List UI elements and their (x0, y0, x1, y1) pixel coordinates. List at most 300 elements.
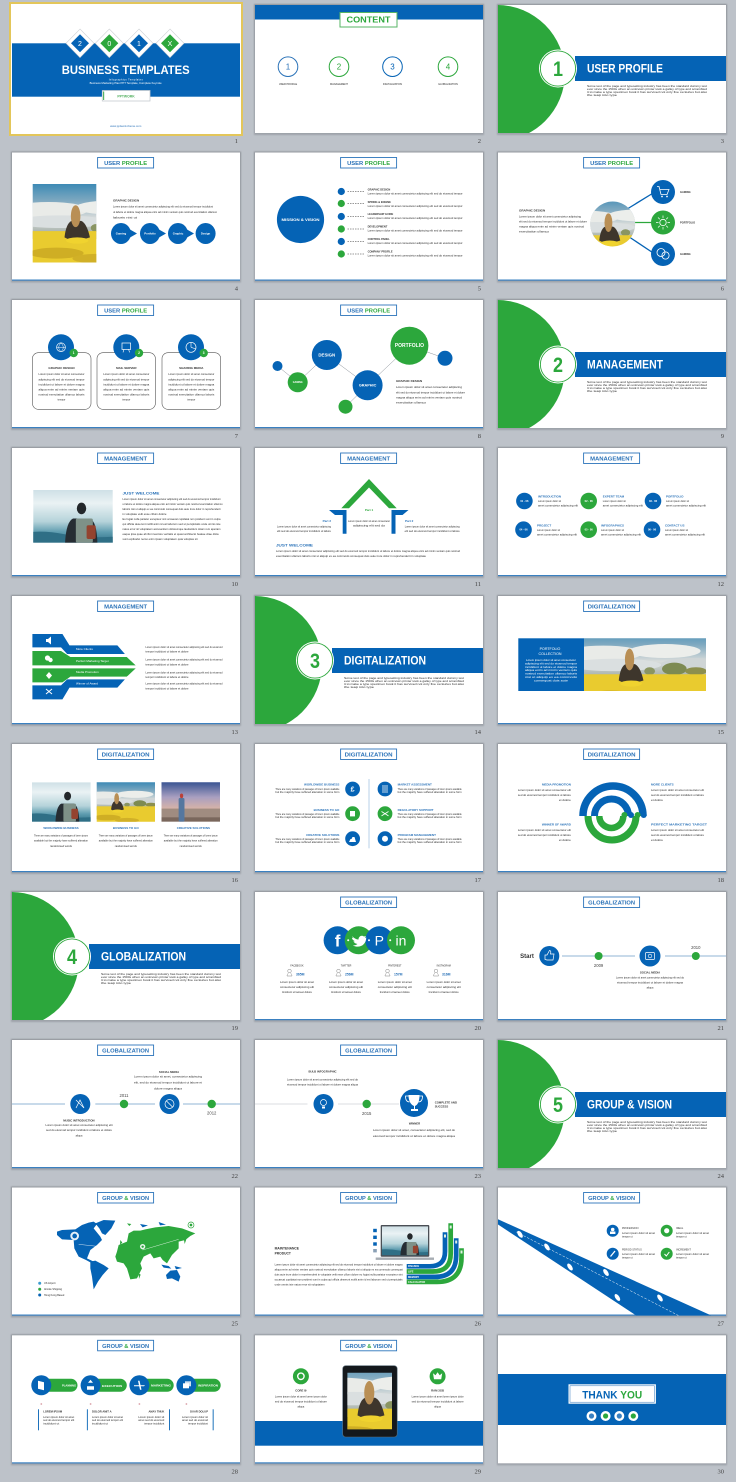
section description: it to make a type specimen book it has survived not only five centuries but also (344, 683, 465, 686)
topic text: amet consectetur adipiscing elit (603, 505, 643, 508)
step text: sed do eiusmod tempor elit (92, 1419, 123, 1422)
icon labels: GAMING (680, 252, 691, 256)
card: mail server: nostrud exercitation ullamco laboris (103, 393, 150, 396)
heading tag: GLOBALIZATION (345, 1048, 392, 1054)
photo: girl at overlook (162, 782, 220, 822)
bubbles: GAMING (293, 381, 303, 384)
left labels (518, 782, 572, 842)
text block: laboris nisi ut aliquip ex ea commodo consequat duis aute irure dolor in reprehenderit (122, 508, 221, 511)
text block: JUST WELCOME (276, 544, 314, 548)
text block (276, 544, 461, 558)
left labels: sed do eiusmod tempor incididunt ut labore (518, 834, 572, 837)
panel: slide 28 process pills: 28 (232, 1468, 238, 1475)
green pills (41, 1379, 221, 1392)
section description: ever since the 1500s when an unknown printer took a galley of type and scrambled (344, 680, 465, 683)
circular photo (590, 202, 636, 246)
topic circles: 03 · 06 (649, 499, 658, 503)
bulb note: Lorem ipsum dolor sit amet consectetur adipiscing elit sed do (287, 1078, 359, 1081)
PPTWORK badge: PPTWORK (117, 94, 135, 98)
feature text: Lorem ipsum dolor sit amet (676, 1253, 709, 1256)
section title: DIGITALIZATION (344, 656, 426, 668)
number ring: 3 (310, 650, 320, 673)
right labels: et dolore (651, 839, 664, 842)
agenda numbers: 4 (446, 62, 451, 72)
heading tag: USER PROFILE (347, 161, 390, 167)
list text: COMPANY PROFILE (368, 250, 393, 254)
step text: LOREM IPSUM (43, 1410, 63, 1414)
text block: sunt explicabo nemo enim ipsam voluptatem quia voluptas sit (122, 538, 198, 541)
card: sharing media: aliqua enim ad minim veniam quis (168, 388, 215, 391)
card: mail server: Lorem ipsum dolor sit amet consectetur (103, 373, 149, 376)
list text (368, 188, 463, 258)
panel: slide 6 connected services: 6 (721, 286, 725, 292)
feature text: PERIOD STATUS (622, 1248, 642, 1252)
heading tag (341, 1340, 397, 1351)
panel: slide 11 house diagram (254, 447, 484, 588)
green half circle (12, 892, 78, 1020)
social stats: FACEBOOK (290, 964, 304, 967)
social stats: Lorem ipsum dolor sit amet (329, 981, 363, 984)
right service text: There are many variations of passages of lorem ipsum available (398, 788, 462, 791)
part 2 left: elit sed do eiusmod tempor incididunt ut labore (277, 530, 332, 533)
right service text: but the majority have suffered alteration in some form (398, 816, 462, 819)
heading tag (98, 158, 154, 168)
year markers: 2012 (207, 1110, 217, 1116)
bulb note: eiusmod tempor incididunt ut labore et dolore magna aliqua (287, 1083, 359, 1086)
panel: slide 13 interlocking arrows: 13 (232, 729, 238, 736)
icon labels: GAMING (680, 190, 691, 194)
section description (344, 677, 465, 689)
text block (113, 198, 218, 220)
social stats: tincidunt ut laoreet dolore (380, 991, 410, 994)
feature text: PROFESSION (622, 1227, 639, 1230)
complete and success label: SUCCESS (435, 1105, 448, 1109)
blue band (255, 1421, 483, 1446)
topic circles: 04 · 06 (519, 528, 528, 532)
social dots (586, 1411, 638, 1421)
panel: slide 14 section digitalization: 14 (474, 729, 482, 736)
bubbles (272, 327, 452, 414)
curved ribbons (407, 1223, 462, 1282)
social stats (280, 964, 461, 994)
service icons: £ (351, 786, 355, 794)
step text (43, 1410, 209, 1425)
map legend (38, 1282, 65, 1297)
feature text: tempor ut (622, 1256, 633, 1259)
road (498, 1219, 711, 1316)
right labels: et dolore (651, 799, 664, 802)
bullet notes: Lorem ipsum dolor sit amet consectetur adipiscing elit sed do eiusmod (146, 646, 223, 649)
card: graphic design: Lorem ipsum dolor sit amet consectetur (38, 373, 85, 376)
heading tag (584, 897, 640, 908)
year marker: 2015 (362, 1111, 372, 1116)
heading tag: USER PROFILE (104, 161, 147, 167)
bullet notes: tempor incididunt ut labore et dolore (146, 676, 189, 679)
list text: Lorem ipsum dolor sit amet consectetur adipiscing elit sed do eiusmod tempor (368, 217, 463, 220)
arrow labels: Media Promotion (76, 670, 99, 674)
text block: in voluptate velit esse cillum dolore (122, 513, 167, 516)
part 1: Part 1 (365, 508, 373, 512)
section description: the leap into type (587, 94, 618, 97)
text block: natus error sit voluptatem accusantium doloremque laudantium totam rem aperiam (122, 528, 220, 531)
year markers (594, 945, 701, 968)
text block: unde omnis iste natus error sit voluptatem (275, 1284, 325, 1286)
panel: slide 30 thank you (497, 1334, 727, 1475)
dots and dashes list (338, 188, 364, 258)
left text: Lorem ipsum dolor sit amet lorem ipsum dolor (275, 1395, 327, 1398)
right text: aliqua (434, 1406, 442, 1409)
list text: Lorem ipsum dolor sit amet consectetur adipiscing elit sed do eiusmod tempor (368, 192, 463, 196)
caption text: There are many variations of passages of lorem ipsum (99, 834, 153, 838)
pill labels (62, 1383, 218, 1388)
panel: slide 1 cover: 1 (235, 138, 238, 145)
caption text: There are many variations of passages of lorem ipsum (34, 834, 88, 838)
text block: qui officia deserunt mollit anim id est laborum sed ut perspiciatis unde omnis iste (122, 523, 221, 526)
heading tag (98, 601, 154, 612)
heading tag: GLOBALIZATION (588, 900, 635, 906)
text block: Lorem ipsum dolor sit amet consectetur adipiscing elit sed do eiusmod tempor incididunt ut labore et dolore magna (275, 1264, 403, 1266)
card: graphic design: GRAPHIC DESIGN (48, 366, 75, 370)
mission circle: MISSION & VISION (282, 218, 320, 222)
list text: Lorem ipsum dolor sit amet consectetur adipiscing elit sed do eiusmod tempor (368, 230, 463, 232)
photo: man (32, 782, 91, 822)
topic text: amet consectetur adipiscing elit (666, 505, 706, 508)
panel: slide 20 social media (254, 891, 484, 1032)
list text: DEVELOPMENT (368, 224, 388, 228)
topic text: Lorem ipsum dolor sit (537, 529, 560, 532)
blue caption box: nisi ut aliquip ex ea commodo (525, 676, 578, 679)
text block: elit sed do eiusmod tempor incididunt ut labore et dolore (519, 220, 588, 224)
panel: slide 17 six services: 17 (474, 877, 482, 884)
topic text: amet consectetur adipiscing elit (665, 534, 705, 537)
left labels: WINNER OF AWARD (542, 823, 572, 827)
social stats: TWITTER (341, 964, 352, 967)
social stats: tincidunt ut laoreet dolore (282, 991, 313, 994)
panel: slide 12 six topics: 12 (718, 581, 724, 588)
panel: slide 28 process pills (11, 1334, 241, 1475)
card: sharing media: adipiscing elit sed do eiusmod tempor (168, 378, 214, 381)
right text: RAM 3GB (431, 1388, 444, 1392)
text block: exercitation ullamco laboris nisi ut aliquip ex ea commodo consequat duis aute irure dolor in reprehenderit in voluptate (276, 555, 427, 558)
step text: Lorem ipsum dolor sit (182, 1416, 208, 1419)
text block (275, 1246, 403, 1286)
road center dashes (516, 1232, 678, 1316)
bubbles: DESIGN (318, 352, 335, 358)
feature text: Lorem ipsum dolor sit amet (622, 1253, 655, 1256)
vertical accent bars (38, 1409, 214, 1430)
panel: slide 16 three photos (11, 743, 241, 884)
feature text: tempor ut (622, 1235, 633, 1238)
number ring (539, 1086, 577, 1124)
arc chart (583, 786, 643, 840)
part 2 left (277, 519, 332, 533)
social media note: Lorem ipsum dolor sit amet consectetur adipiscing elit sed do (616, 976, 685, 980)
number ring (53, 938, 91, 976)
arrow labels: More Clients (76, 647, 93, 651)
music note (46, 1118, 113, 1138)
text block: magna aliqua enim ad minim veniam quis nostrud (396, 396, 463, 399)
bubbles: GRAPHIC (359, 384, 377, 388)
section description (587, 381, 708, 393)
green half circle (498, 5, 564, 133)
left service text: There are many variations of passages of lorem ipsum available (275, 813, 340, 816)
section description: ever since the 1500s when an unknown printer took a galley of type and scrambled (101, 976, 222, 979)
left labels: et dolore (559, 799, 572, 802)
caption text: available but the majority have suffered alteration (99, 840, 153, 842)
panel: slide 27 road diagram: 27 (718, 1320, 725, 1328)
text block: Lorem ipsum dolor sit amet consectetur adipiscing (519, 216, 582, 218)
agenda circles (278, 57, 458, 76)
photo captions: WORLDWIDE BUSINESS (43, 826, 79, 830)
card: mail server: incididunt ut labore et dolore magna (103, 383, 150, 386)
social circles (324, 926, 415, 954)
agenda numbers: 1 (286, 62, 291, 72)
agenda labels: DIGITALIZATION (383, 83, 402, 86)
text block: GRAPHIC DESIGN (519, 208, 545, 212)
panel: slide 16 three photos: 16 (232, 877, 239, 884)
heading tag (98, 1045, 154, 1056)
feature text: tempor ut (676, 1256, 687, 1259)
step text: tempor incididunt (144, 1422, 165, 1425)
part 2 right: elit sed do eiusmod tempor incididunt ut labore (405, 530, 460, 533)
winner note (373, 1122, 455, 1138)
panel: slide 13 interlocking arrows (11, 595, 241, 736)
panel: slide 11 house diagram: 11 (475, 581, 481, 588)
topic text: Lorem ipsum dolor sit (538, 500, 561, 503)
panel: slide 10 just welcome: 10 (232, 581, 238, 588)
text block (519, 208, 588, 234)
social stats: consectetur adipiscing elit (378, 986, 412, 989)
left labels: sed do eiusmod tempor incididunt ut labore (518, 794, 572, 797)
blue caption box (518, 638, 584, 691)
topic text: amet consectetur adipiscing elit (538, 505, 578, 508)
topic text: Lorem ipsum dolor sit (666, 500, 689, 503)
panel: slide 5 mission and vision (254, 152, 484, 292)
caption text: randomised words (180, 845, 202, 848)
complete and success label: COMPLETE AND (435, 1100, 457, 1104)
text block (122, 492, 223, 541)
bubble row: Gaming (116, 232, 126, 236)
panel: slide 1 cover (10, 3, 242, 145)
social stats: Lorem ipsum dolor sit amet (378, 981, 412, 984)
ribbon labels: FINANCE (408, 1265, 419, 1268)
blue caption box: nostrud exercitation ullamco laboris (525, 673, 578, 676)
heading tag (584, 453, 640, 464)
photo: girl in field (96, 782, 155, 822)
text block: magna aliqua enim ad minim veniam quis nostrud (519, 226, 585, 228)
card: sharing media (162, 334, 221, 409)
bulb note (287, 1069, 359, 1086)
heading tag: USER PROFILE (347, 308, 390, 314)
blue caption box: consequat duis aute (534, 679, 569, 682)
winner note: eiusmod tempor incididunt ut labore et dolore magna aliqua (373, 1134, 455, 1138)
card: mail server: tempor (122, 398, 130, 401)
text block: occaecat cupidatat non proident sunt in culpa qui officia deserunt mollit anim id est laborum sed ut perspiciatis (275, 1278, 403, 1282)
panel: slide 2 content: 2 (478, 138, 481, 145)
map legend: US Airport (44, 1282, 56, 1285)
step text: incididunt ut (92, 1422, 108, 1425)
social media note: aliqua (647, 986, 654, 990)
bullet notes: Lorem ipsum dolor sit amet consectetur adipiscing elit sed do eiusmod (146, 658, 223, 661)
topic circles: 01 · 06 (520, 499, 529, 503)
left service text: BUSINESS TO GO (314, 808, 340, 812)
number ring: 2 (553, 354, 563, 377)
subtitle (90, 78, 162, 85)
list text: SPRING & ENGINE (368, 200, 391, 204)
music note: aliqua (76, 1134, 83, 1138)
caption text: randomised words (115, 845, 138, 848)
social circles: f (335, 932, 341, 950)
laptop (372, 1225, 438, 1260)
social circles: in (396, 932, 406, 948)
panel: slide 19 section globalization: 19 (232, 1025, 238, 1032)
year markers (119, 1093, 217, 1116)
heading tag: MANAGEMENT (590, 456, 634, 462)
heading tag: GROUP & VISION (102, 1196, 149, 1202)
card: graphic design: tempor (58, 398, 66, 401)
section description: it to make a type specimen book it has survived not only five centuries but also (587, 1127, 708, 1130)
list text: Lorem ipsum dolor sit amet consectetur adipiscing elit sed do eiusmod tempor (368, 205, 463, 208)
part 2 right: Lorem ipsum dolor sit amet consectetur adipiscing (405, 525, 460, 528)
music note: sed do eiusmod tempor incididunt ut labore et dolore (46, 1129, 113, 1132)
part 1: adipiscing elit sed do (353, 525, 386, 528)
heading tag: GROUP & VISION (345, 1344, 392, 1350)
panel: slide 17 six services (254, 743, 484, 884)
icon labels: PORTFOLIO (680, 220, 695, 224)
connecting lines (278, 346, 445, 407)
part 2 right: Part 2 (405, 519, 414, 523)
heading tag (341, 305, 397, 316)
panel: slide 18 concentric arcs: 18 (718, 877, 724, 884)
topic text: Lorem ipsum dolor sit (603, 500, 626, 503)
panel: slide 25 world map (11, 1186, 241, 1328)
connectors (628, 192, 654, 208)
heading tag: GLOBALIZATION (345, 900, 392, 906)
part 1: Lorem ipsum dolor sit amet consectetur (348, 520, 390, 523)
left service text: but the majority have suffered alteration in some form (275, 816, 339, 819)
card: graphic design: adipiscing elit sed do eiusmod tempor (38, 378, 85, 381)
social stats: consectetur adipiscing elit (329, 986, 363, 989)
topic text: Lorem ipsum dolor sit (665, 529, 688, 532)
topic text: PROJECT (537, 524, 551, 528)
section description (101, 973, 222, 985)
list text: LEADERSHIP GUIDE (368, 212, 393, 216)
left service text: There are many variations of passages of lorem ipsum available (275, 838, 340, 841)
card: sharing media: SHARING MEDIA (179, 366, 204, 370)
panel: slide 24 section group and vision (496, 1038, 728, 1178)
winner note: WINNER (409, 1122, 420, 1126)
panel: slide 3 section user profile: 3 (721, 138, 724, 145)
social note: dolore magna aliqua (154, 1087, 182, 1091)
left service text: There are many variations of passages of lorem ipsum available (275, 788, 340, 791)
heading tag (584, 601, 640, 612)
panel: slide 22 timeline 2011-2012 (11, 1039, 241, 1180)
panel: slide 22 timeline 2011-2012: 22 (232, 1173, 238, 1180)
blue left wall (329, 510, 346, 534)
content tag: CONTENT (346, 16, 391, 24)
topic text: Lorem ipsum dolor sit (601, 529, 624, 532)
pill labels: INSPIRATION (198, 1383, 218, 1387)
icon: music (70, 1094, 90, 1114)
title bar (89, 944, 240, 969)
heading tag: MANAGEMENT (347, 456, 391, 462)
text block: JUST WELCOME (122, 492, 160, 496)
arrow icons (45, 636, 53, 694)
text block: duis aute irure dolor in reprehenderit in voluptate velit esse cillum dolore eu fugiat nulla pariatur excepteur sint (275, 1274, 403, 1276)
section description: Some text of the page and typesetting industry has been the standard dummy text (587, 85, 707, 88)
photo: girl in field (32, 184, 96, 262)
ribbon labels: MEMORY (408, 1276, 419, 1279)
pill labels: PLANNING (62, 1383, 76, 1387)
section description: Some text of the page and typesetting industry has been the standard dummy text (587, 381, 707, 384)
section description: the leap into type (587, 390, 618, 393)
panel: slide 7 three cards: 7 (235, 433, 239, 440)
part 2 right (405, 519, 460, 533)
heading tag (341, 1192, 397, 1203)
topic text (537, 494, 706, 537)
topic text: INFOGRAPHICS (601, 524, 624, 528)
title bar (575, 1092, 726, 1117)
part 2 left: Part 2 (323, 519, 331, 523)
panel: slide 15 portfolio collection: 15 (718, 729, 724, 736)
step text: sed do eiusmod tempor elit (43, 1419, 74, 1422)
subtitle: Infographics Templates (109, 78, 143, 82)
number ring (296, 642, 334, 680)
agenda labels: USER PROFILE (279, 83, 297, 86)
heading tag: GROUP & VISION (102, 1344, 149, 1350)
left service text: CREATIVE SOLUTIONS (306, 833, 339, 837)
panel: slide 23 timeline bulb: 23 (474, 1173, 481, 1180)
heading tag (98, 1192, 154, 1203)
section description (587, 85, 708, 97)
panel: slide 20 social media: 20 (474, 1025, 481, 1032)
heading tag: DIGITALIZATION (345, 752, 393, 758)
topic circles: 05 · 06 (585, 528, 593, 532)
list text: CONTROL PANEL (368, 237, 390, 241)
content tag (340, 12, 397, 27)
social stats: 157M (394, 972, 403, 976)
heading tag (341, 1045, 397, 1056)
text block: Lorem ipsum dolor sit amet consectetur adipiscing (396, 386, 463, 389)
arrow labels: Winner of Award (76, 682, 98, 686)
section description: ever since the 1500s when an unknown printer took a galley of type and scrambled (587, 88, 708, 91)
footprints (516, 1230, 664, 1302)
section description: ever since the 1500s when an unknown printer took a galley of type and scrambled (587, 1124, 708, 1127)
section title: GLOBALIZATION (101, 952, 186, 964)
agenda labels: GLOBALIZATION (438, 83, 458, 86)
topic circles: 06 · 06 (648, 528, 657, 532)
right service text (398, 783, 462, 844)
icon: sun (651, 210, 675, 234)
heading tag (584, 749, 640, 760)
section description (587, 1121, 708, 1133)
pill labels: MARKETING (151, 1383, 171, 1387)
arrow labels: Perfect Marketing Target (76, 659, 109, 663)
ribbon labels (408, 1265, 425, 1284)
card: sharing media: tempor (187, 398, 195, 401)
green half circle (498, 1040, 564, 1168)
bubble row: Graphic (173, 232, 184, 236)
bullet notes: tempor incididunt ut labore et dolore (146, 651, 189, 654)
panel: slide 29 tablet (198, 1325, 534, 1482)
heading tag: DIGITALIZATION (588, 604, 636, 610)
social stats: Lorem ipsum dolor sit amet (280, 981, 314, 984)
right labels: MORE CLIENTS (651, 782, 674, 786)
list text: Lorem ipsum dolor sit amet consectetur adipiscing elit sed do eiusmod tempor (368, 242, 463, 245)
step text: amet sed do eiusmod (138, 1419, 165, 1422)
arrow shapes (32, 634, 136, 699)
list text: GRAPHIC DESIGN (368, 188, 390, 192)
